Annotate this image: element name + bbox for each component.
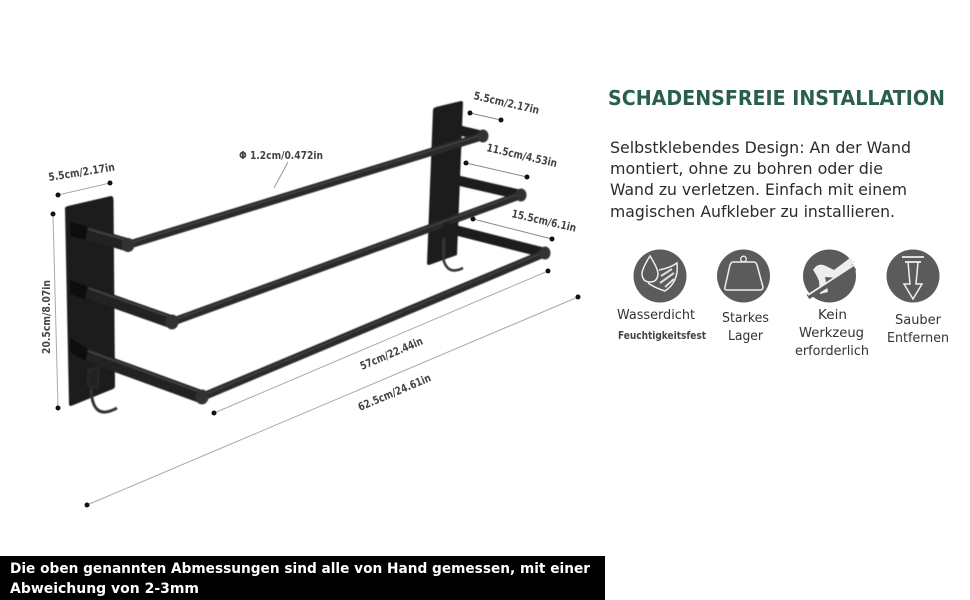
label: Kein	[818, 308, 847, 323]
right wall plate	[427, 101, 463, 265]
label: Starkes	[722, 311, 769, 326]
dimension: total length	[84, 294, 580, 508]
right hook	[443, 238, 463, 270]
bottom towel bar	[87, 227, 550, 404]
label second line: Lager	[728, 329, 764, 344]
feature: no tools	[795, 250, 869, 359]
description text: montiert, ohne zu bohren oder die	[610, 159, 883, 178]
feature: waterproof	[617, 250, 706, 342]
left wall plate	[65, 196, 115, 406]
description text: Selbstklebendes Design: An der Wand	[610, 138, 911, 157]
footer note banner: Die oben genannten Abmessungen sind alle von Hand gemessen, mit einer	[10, 561, 591, 577]
dimension: total length: 62.5cm/24.61in	[356, 371, 433, 414]
feature: clean removal	[886, 250, 949, 346]
icon: water drop and shield	[634, 250, 686, 302]
dimension: height	[40, 212, 60, 410]
label second line: Werkzeug	[799, 326, 864, 341]
dimension: bar length	[212, 268, 550, 416]
top towel bar	[87, 127, 488, 252]
left hook	[88, 367, 117, 412]
dimension: top depth: 5.5cm/2.17in	[472, 89, 541, 117]
footer note banner: Abweichung von 2-3mm	[10, 581, 199, 597]
dimension: bottom depth	[470, 207, 578, 242]
dimension: middle depth	[464, 141, 558, 180]
dimension: bar length: 57cm/22.44in	[358, 335, 425, 373]
dimension: plate width left	[47, 161, 116, 198]
label second line: Entfernen	[887, 331, 949, 346]
dimension: plate width left: 5.5cm/2.17in	[47, 161, 116, 184]
description text	[610, 138, 911, 221]
icon: weight	[717, 250, 770, 302]
dimension: bar diameter	[239, 149, 323, 188]
dimension: bar diameter: Φ 1.2cm/0.472in	[239, 149, 323, 162]
feature: strong load	[717, 250, 770, 344]
label: Sauber	[895, 313, 942, 328]
description text: magischen Aufkleber zu installieren.	[610, 202, 895, 221]
icon: crossed out hammer	[803, 250, 856, 302]
description text: Wand zu verletzen. Einfach mit einem	[610, 180, 907, 199]
sub label: Feuchtigkeitsfest	[618, 330, 706, 342]
label: Wasserdicht	[617, 308, 695, 323]
product diagram: towel rack with dimensions	[40, 89, 580, 508]
icon: strip pulled downward	[886, 250, 940, 302]
middle towel bar	[87, 177, 526, 330]
dimension: bottom depth: 15.5cm/6.1in	[510, 207, 578, 235]
footer note banner	[0, 556, 605, 600]
dimension: middle depth: 11.5cm/4.53in	[485, 141, 558, 170]
title: SCHADENSFREIE INSTALLATION	[608, 86, 945, 110]
label third line: erforderlich	[795, 344, 869, 359]
dimension: height: 20.5cm/8.07in	[40, 280, 53, 354]
